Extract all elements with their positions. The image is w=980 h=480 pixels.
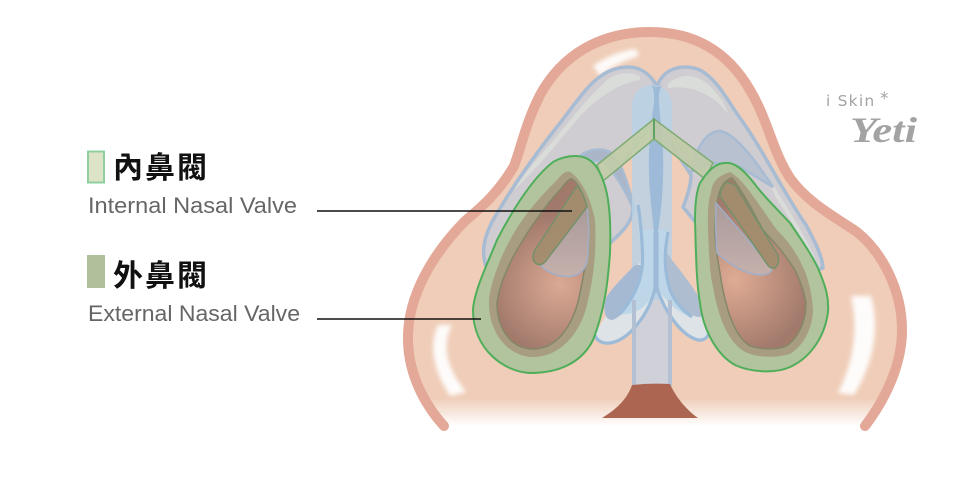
internal valve bridge band	[597, 119, 713, 181]
nose outline	[408, 32, 902, 426]
left dark lobe	[604, 265, 642, 320]
leader line: external	[317, 318, 481, 320]
legend: internal nasal valve	[88, 152, 297, 218]
right pale blue crus	[657, 230, 692, 317]
heading: external nasal valve: 外鼻閥	[113, 260, 209, 293]
back alar domes	[578, 131, 773, 208]
nose illustration	[400, 32, 902, 434]
swatch: internal	[88, 152, 104, 182]
right internal valve strip	[720, 182, 779, 268]
right outer lobe	[657, 262, 709, 340]
left pale blue crus	[620, 230, 655, 314]
highlight: right ala	[838, 296, 875, 395]
left dome	[578, 150, 633, 208]
swatch: external	[87, 255, 105, 288]
highlight: bridge	[593, 49, 639, 76]
upper pale blue column	[632, 85, 672, 300]
column side stripes	[634, 300, 670, 386]
legend: external nasal valve	[87, 255, 300, 326]
left lateral wall	[541, 207, 589, 277]
left internal valve strip	[533, 186, 587, 265]
columella base	[602, 384, 698, 418]
central septum column	[632, 85, 672, 386]
label: External Nasal Valve: External Nasal Valve	[88, 301, 300, 326]
left outer lobe	[595, 262, 655, 343]
left upper lateral cartilage	[484, 67, 657, 290]
light cartilage sheen	[514, 73, 816, 260]
left nostril opening	[497, 179, 588, 349]
logo script: Yeti: Yeti	[850, 110, 917, 150]
right dome	[691, 131, 773, 187]
logo text: i Skin: i Skin	[826, 92, 875, 110]
highlight: left ala	[433, 325, 466, 396]
right ring	[708, 172, 813, 357]
logo star: *	[880, 89, 888, 109]
right external nasal valve	[695, 163, 828, 371]
crura strokes	[595, 205, 709, 343]
bottom fade	[400, 398, 900, 426]
left ring	[489, 172, 595, 357]
left external nasal valve	[473, 156, 610, 373]
right upper lateral cartilage	[655, 67, 823, 290]
right dark lobe	[664, 250, 703, 317]
medial crura lobes	[595, 205, 709, 386]
septum blue strokes	[649, 84, 663, 293]
leader line: internal	[317, 210, 572, 212]
logo: i Skin Yeti	[826, 89, 917, 150]
right lateral wall	[716, 203, 772, 275]
label: Internal Nasal Valve: Internal Nasal Valve	[88, 193, 297, 218]
lower grey columella	[632, 280, 672, 386]
skin fill	[408, 32, 902, 426]
right nostril opening	[715, 178, 806, 349]
heading: internal nasal valve: 內鼻閥	[113, 152, 209, 185]
